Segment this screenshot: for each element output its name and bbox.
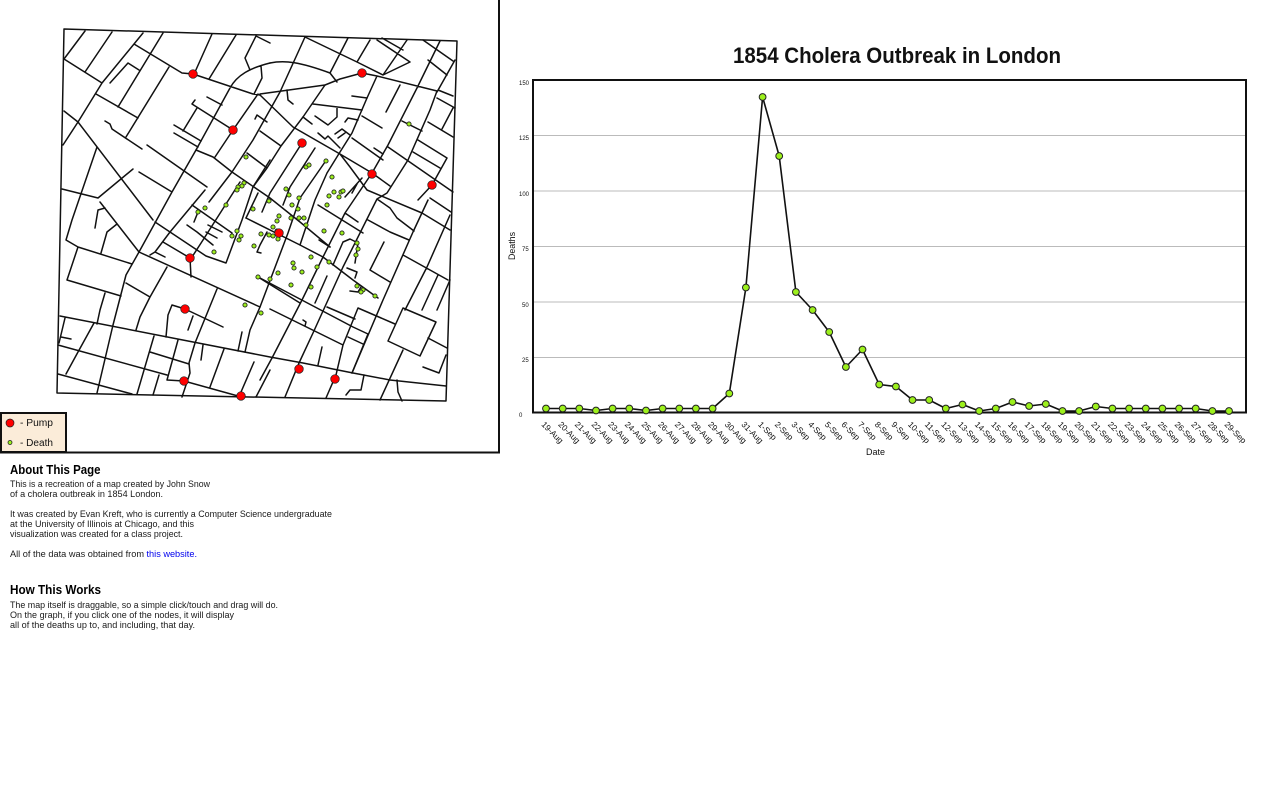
x axis date labels: 28-Sep [1206, 419, 1232, 446]
how this works text: The map itself is draggable, so a simple click/touch and drag will do. [10, 600, 278, 610]
x axis date labels: 1-Sep [756, 419, 779, 442]
line chart: deaths per day [507, 80, 1249, 457]
x axis date labels: 8-Sep [873, 419, 896, 442]
x axis date labels: 29-Sep [1223, 419, 1249, 446]
x axis date labels: 21-Aug [573, 419, 599, 446]
map of London streets with pumps and deaths [57, 29, 457, 401]
about this page text: this website. [146, 549, 197, 559]
y axis labels [519, 81, 530, 419]
about this page text: About This Page [10, 463, 101, 477]
x axis date labels: 20-Sep [1073, 419, 1099, 446]
data line [546, 97, 1229, 411]
x axis date labels: 10-Sep [906, 419, 932, 446]
x axis date labels: 17-Sep [1023, 419, 1049, 446]
gridlines [533, 136, 1246, 358]
y axis labels: 125 [519, 136, 530, 142]
about this page text: All of the data was obtained from [10, 549, 144, 559]
x axis date labels: 25-Aug [640, 419, 666, 446]
how this works text [10, 583, 278, 630]
x axis date labels: 31-Aug [739, 419, 766, 446]
how this works text: On the graph, if you click one of the nodes, it will display [10, 610, 234, 620]
legend: - Pump [20, 418, 53, 429]
x axis date labels: 4-Sep [806, 419, 829, 442]
x axis date labels: 18-Sep [1039, 419, 1066, 446]
legend [1, 413, 66, 452]
x axis date labels: 26-Aug [656, 419, 682, 446]
about this page text: It was created by Evan Kreft, who is currently a Computer Science undergraduate [10, 509, 332, 519]
x axis date labels: 13-Sep [956, 419, 982, 446]
x axis date labels: 29-Aug [706, 419, 732, 446]
x axis date labels: 2-Sep [773, 419, 796, 442]
about this page text: This is a recreation of a map created by John Snow [10, 479, 210, 489]
x axis date labels: 11-Sep [923, 419, 949, 445]
x axis date labels: 19-Sep [1056, 419, 1082, 446]
x axis date labels: 22-Aug [590, 419, 616, 446]
death markers [196, 122, 411, 315]
how this works text: How This Works [10, 583, 101, 597]
chart title: 1854 Cholera Outbreak in London [733, 43, 1061, 68]
x axis date labels: 6-Sep [839, 419, 862, 442]
x axis date labels: 27-Aug [673, 419, 699, 446]
x axis date labels: 20-Aug [556, 419, 583, 446]
y axis labels: 100 [519, 192, 530, 198]
x axis date labels: 24-Aug [623, 419, 649, 446]
x axis date labels: 16-Sep [1006, 419, 1032, 446]
x axis date labels: 5-Sep [823, 419, 846, 442]
y axis labels: 50 [522, 303, 529, 309]
pump markers [180, 69, 436, 400]
x axis date labels: 30-Aug [723, 419, 749, 446]
x axis date labels: 19-Aug [540, 419, 566, 446]
x axis date labels: 23-Aug [606, 419, 632, 446]
x axis date labels: 24-Sep [1139, 419, 1166, 446]
how this works text: all of the deaths up to, and including, that day. [10, 620, 195, 630]
about this page text [10, 463, 332, 559]
x axis date labels: 22-Sep [1106, 419, 1132, 446]
x axis date labels: 12-Sep [939, 419, 966, 446]
x axis date labels: 28-Aug [689, 419, 716, 446]
x axis date labels: 26-Sep [1173, 419, 1199, 446]
about this page text: of a cholera outbreak in 1854 London. [10, 489, 163, 499]
x axis date labels: 27-Sep [1189, 419, 1216, 446]
x axis date labels: 14-Sep [973, 419, 999, 446]
x axis date labels: 15-Sep [989, 419, 1016, 446]
about this page text: visualization was created for a class project. [10, 529, 183, 539]
x axis date labels: 21-Sep [1089, 419, 1116, 446]
x axis title: Date [866, 447, 885, 457]
y axis labels: 150 [519, 81, 530, 87]
x axis date labels: 25-Sep [1156, 419, 1182, 446]
data nodes [543, 94, 1232, 414]
y axis labels: 75 [522, 247, 529, 253]
x axis date labels: 7-Sep [856, 419, 879, 442]
y axis title: Deaths [507, 232, 517, 260]
about this page text: at the University of Illinois at Chicago, and this [10, 519, 194, 529]
y axis labels: 0 [519, 413, 523, 419]
plot border [533, 80, 1246, 412]
y axis labels: 25 [522, 358, 529, 364]
panel: map frame [0, 0, 499, 452]
x axis date labels: 23-Sep [1123, 419, 1149, 446]
legend: - Death [20, 438, 53, 449]
x axis date labels [540, 419, 1249, 446]
x axis date labels: 3-Sep [789, 419, 812, 442]
street network [57, 29, 457, 401]
x axis date labels: 9-Sep [889, 419, 912, 442]
